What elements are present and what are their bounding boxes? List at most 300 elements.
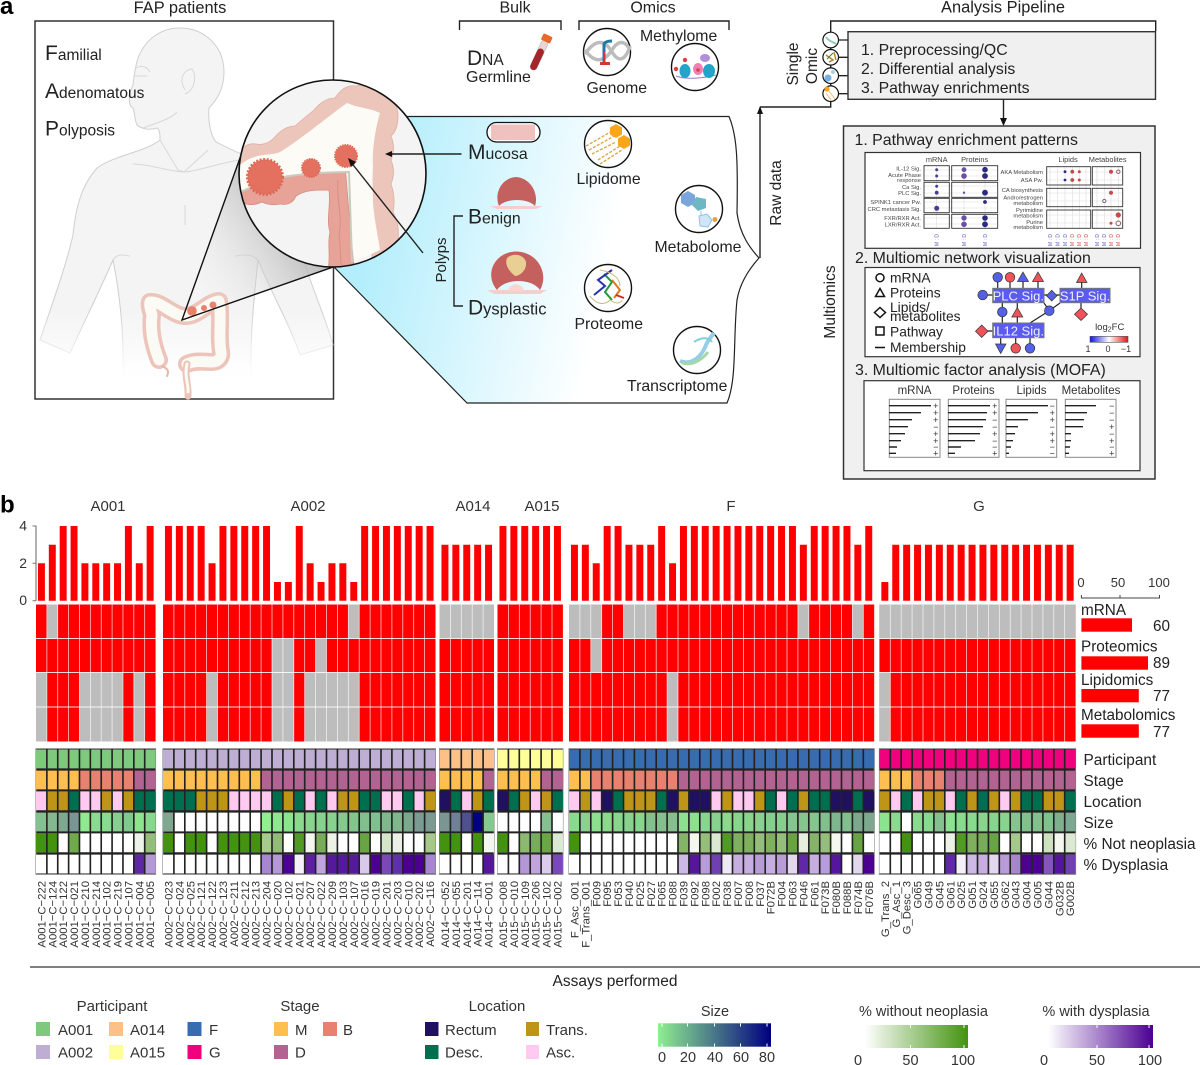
sample labels: F073B [820,881,832,914]
annotation tracks [36,749,1076,874]
track group: A001 [36,749,156,874]
label: Genome: Genome [586,80,647,97]
heatmap group: A002 [163,604,436,742]
text: pipeline steps: 2. Differential analysis [861,61,1015,78]
chart: MOFA: + [933,401,938,411]
icon: lipidome [584,120,632,168]
chart: MOFA: − [1050,448,1055,458]
chart: MOFA: + [1109,448,1114,458]
chart: MOFA: − [1109,408,1114,418]
chart: MOFA: + [992,408,997,418]
sample labels: F088B [842,881,854,914]
bar chart: samples per assay: Metabolomics [1081,707,1176,724]
legend: Size: Size [701,1004,729,1020]
legend: Stage: Stage [280,998,320,1015]
sample labels: F040 [624,881,636,907]
bar chart: samples per assay: 77 [1153,688,1170,705]
chart: pathway enrichment dot plot [865,152,1140,248]
legend: log2FC colorbar [1085,322,1131,354]
label: Dysplastic: Dysplastic [468,296,546,320]
chart: MOFA: Proteins [952,385,995,397]
chart: MOFA: Metabolites [1062,385,1121,397]
heatmap group: A001 [36,604,156,742]
chart: pathway enrichment dot plot: M : D [1077,234,1083,246]
chart: MOFA: + [992,448,997,458]
sample labels: A015−C−206 [531,881,543,948]
track group: A014 [440,749,494,874]
legend: log2FC colorbar: −1 [1121,344,1131,354]
heatmap group: A014 [440,604,494,742]
sample labels: A014−C−001 [484,881,496,948]
chart: MOFA: + [992,401,997,411]
sample labels: F008 [744,881,756,907]
sample labels: G045 [934,881,946,909]
group headings [90,498,985,515]
sample labels: F088 [668,881,680,907]
bar chart: assays per sample [41,526,1070,601]
panel: FAP patients [35,0,334,399]
sample labels: A001−C−222 [36,881,48,948]
chart: pathway enrichment dot plot: Acute Phase [888,173,921,179]
chart: pathway enrichment dot plot: Andro/estrogen [1003,196,1043,202]
label: Polyps: Polyps [433,237,450,283]
icon: genome [584,28,630,76]
sample labels: F053 [613,881,625,907]
sample labels: G002B [1065,881,1077,916]
sample labels: A002−C−202 [414,881,426,948]
sample labels: G062 [1000,881,1012,909]
track group: A015 [498,749,563,874]
network legend: mRNA [890,270,931,286]
chart: pathway enrichment dot plot: Metabolites [1089,155,1127,164]
track labels: % Dysplasia [1084,857,1169,874]
bar chart axis: assays per sample: 2 [19,555,27,571]
chart: MOFA: − [1109,415,1114,425]
chart: pathway enrichment dot plot: ASA Pw. [1021,178,1043,184]
pathway: S1P Sig: S1P Sig. [1060,288,1110,303]
bar chart: samples per assay [1081,602,1176,741]
track labels: % Not neoplasia [1084,836,1196,853]
chart: pathway enrichment dot plot: mRNA [926,155,948,164]
icon: omic lipidome [823,86,838,101]
chart: MOFA: − [1109,442,1114,452]
legend: with dysplasia: % with dysplasia [1042,1004,1151,1020]
sample labels: F009 [591,881,603,907]
sample labels: A002−C−025 [185,881,197,948]
text: pipeline steps: 3. Pathway enrichments [861,80,1030,97]
track group: A002 [163,749,436,874]
heading: pathway enrichment patterns: 1. Pathway enrichment patterns [854,132,1078,149]
sample labels: A002−C−209 [327,881,339,948]
patient box [35,21,334,399]
sample labels: F025 [635,881,647,907]
sample labels: A002−C−016 [360,881,372,948]
legend: without neoplasia [854,1004,989,1065]
sample labels: F007 [733,881,745,907]
chart: MOFA: + [933,436,938,446]
bracket: Omics [579,21,729,30]
chart: pathway enrichment dot plot: PLC Sig. [898,191,921,197]
icon: metabolome [676,186,722,232]
legend: Participant: F [209,1022,218,1039]
network legend: Membership [890,340,966,355]
sample labels: A002−C−212 [240,881,252,948]
sample labels: G004 [1022,881,1034,909]
heading: MOFA: 3. Multiomic factor analysis (MOFA) [855,362,1106,379]
sample labels: F037 [755,881,767,907]
group headings: G [973,498,985,515]
legend: log2FC colorbar: 1 [1085,344,1091,354]
chart: MOFA: + [1109,436,1114,446]
sample labels: F065 [657,881,669,907]
legend: Participant: A002 [58,1044,93,1062]
label: Proteome: Proteome [574,316,643,333]
chart: pathway enrichment dot plot: Pyrimidine [1016,208,1043,214]
legend: Participant: G [209,1044,221,1062]
sample labels: A015−C−002 [552,881,564,948]
sample labels: A002−C−107 [349,881,361,948]
chart: MOFA: − [992,436,997,446]
group headings: F [726,498,736,515]
chart: MOFA: + [933,415,938,425]
icon: omic proteome [823,50,838,65]
arrow: raw data [757,21,1156,258]
sample labels: A002−C−102 [283,881,295,948]
sample labels: A002−C−116 [425,881,437,947]
bar chart axis: assays per sample: 0 [19,592,27,608]
sample labels: F076B [864,881,876,914]
chart: pathway enrichment dot plot: FXR/RXR Act. [884,216,921,222]
sample labels: A001−C−107 [123,881,135,948]
chart: MOFA [864,381,1140,471]
chart: MOFA: − [1109,401,1114,411]
track labels: Location [1084,794,1142,811]
chart: MOFA: − [933,422,938,432]
sample labels: A002−C−213 [251,881,263,948]
chart: pathway enrichment dot plot: metabolism [1013,201,1043,207]
sample labels: A002−C−021 [294,881,306,948]
polyp: arrowed [335,145,357,167]
legend: Participant: A014 [130,1022,165,1039]
legend: Participant: A001 [58,1022,93,1039]
sample labels: A014−C−114 [473,881,485,947]
arrow: polyps to lens [348,158,423,253]
magnification wedge [182,158,333,320]
mucosa sample [487,122,540,142]
sample labels: G055 [989,881,1001,909]
axis: samples per assay: 50 [1111,575,1125,590]
label: Lipidome: Lipidome [576,171,641,188]
group headings: A002 [290,498,326,515]
sample labels: G032B [1054,881,1066,916]
chart: pathway enrichment dot plot: M : D [1063,234,1069,246]
network legend: metabolites [890,309,961,324]
chart: MOFA: mRNA [898,385,932,397]
axis: samples per assay: 0 [1077,575,1085,590]
chart: pathway enrichment dot plot: Purine [1026,220,1043,226]
chart: pathway enrichment dot plot: IL-12 Sig. [896,166,921,172]
arrow: single-omic to multiomics [1000,100,1007,126]
sample labels: A015−C−102 [542,881,554,948]
chart: MOFA: + [933,448,938,458]
sample labels: A002−C−019 [371,881,383,948]
illustration: small colon [150,301,221,396]
heading: network visualization: 2. Multiomic network visualization [855,250,1091,267]
sample labels: A001−C−005 [145,881,157,948]
text: DNA Germline: DNA [467,47,504,70]
legend: Location: Location [469,998,525,1015]
icon: transcriptome [674,326,720,374]
sample labels: F004 [777,881,789,907]
sample labels: A002−C−103 [338,881,350,948]
legend: Location: Rectum [445,1022,497,1039]
chart: pathway enrichment dot plot: SPINK1 cancer Pw. [870,200,921,206]
chart: pathway enrichment dot plot: LXR/RXR Act. [885,222,921,228]
heatmap group: A015 [498,604,563,742]
chart: pathway enrichment dot plot: response [897,178,921,184]
bar chart: samples per assay: mRNA [1081,602,1127,619]
divider [30,966,1200,968]
chart: pathway enrichment dot plot: CA biosynthesis [1002,188,1043,194]
sample labels: F_Trans_001 [580,881,592,948]
chart: MOFA: − [992,415,997,425]
text: Familial Adenomatous Polyposis: Polyposis [45,118,115,140]
track labels: Stage [1084,773,1124,790]
sample labels: G_Asc_1 [891,881,903,927]
polyp: large [248,160,282,194]
chart: MOFA: + [1050,429,1055,439]
chart: MOFA: − [933,442,938,452]
arrow: mucosa to lens [385,151,462,157]
chart: MOFA: + [1050,436,1055,446]
chart: MOFA: − [1050,442,1055,452]
sample labels: A002−C−211 [229,881,241,947]
sample labels: A001−C−021 [69,881,81,948]
bar chart: samples per assay: Proteomics [1081,639,1158,656]
chart: MOFA: + [1109,422,1114,432]
legend: Stage [274,998,353,1062]
chart: MOFA: − [992,422,997,432]
chart: pathway enrichment dot plot: M : D [983,234,989,246]
chart: pathway enrichment dot plot: M : D [1084,234,1090,246]
sample labels: G049 [924,881,936,909]
sample labels: G044 [1043,881,1055,909]
text: DNA Germline [466,47,531,86]
icon: omic transcriptome [823,32,838,48]
sample labels: F039 [678,881,690,907]
sample labels: A002−C−121 [196,881,208,948]
track group: G [879,749,1076,874]
icon: proteome [584,264,632,312]
legend: log2FC colorbar: log [1095,322,1108,333]
sample labels: A002−C−204 [262,881,274,948]
sample labels: A014−C−055 [451,881,463,948]
chart: pathway enrichment dot plot: M : D [1048,234,1054,246]
sample labels [36,881,1077,948]
chart: pathway enrichment dot plot: M : D [1070,234,1076,246]
sample labels: A014−C−201 [462,881,474,948]
track group: F [569,749,874,874]
chart: pathway enrichment dot plot: Lipids [1058,155,1078,164]
label: Single Omic [785,42,821,86]
network legend: Pathway [890,324,943,340]
label: Mucosa: Mucosa [468,141,528,164]
chart: pathway enrichment dot plot: M : D [934,234,940,246]
chart: pathway enrichment dot plot: Ca Sig. [902,185,921,191]
bar chart: samples per assay: 60 [1153,618,1170,635]
label: Benign: Benign [468,206,521,228]
label: Single Omic: Single [785,42,802,86]
chart: MOFA: + [933,408,938,418]
chart: pathway enrichment dot plot: M : D [1109,234,1115,246]
legend: with dysplasia [1040,1004,1162,1065]
chart: MOFA: − [1050,401,1055,411]
sample labels: A001−C−004 [134,881,146,948]
sample labels: F080B [831,881,843,914]
chart: pathway enrichment dot plot: AKA Metabolism [1000,170,1043,176]
sample labels: F038 [722,881,734,907]
illustration: dysplastic polyp [487,252,547,294]
sample labels: A001−C−219 [112,881,124,948]
chart: pathway enrichment dot plot: M : D [1056,234,1062,246]
track labels: Participant [1084,752,1157,769]
sample labels: F061 [809,881,821,907]
label: Raw data: Raw data [768,160,785,226]
sample labels: A001−C−124 [47,881,59,948]
group headings: A015 [524,498,560,515]
legend: Size [658,1004,775,1065]
illustration: magnified colon [236,80,426,270]
sample labels: F063 [788,881,800,907]
axis: samples per assay [1077,575,1170,598]
legend: Participant [36,998,221,1062]
polyp: medium [302,159,320,177]
network legend: Proteins [890,286,941,300]
group headings: A001 [90,498,126,515]
bar chart: samples per assay: 77 [1153,724,1170,741]
network legend [874,270,966,355]
sample labels: F046 [798,881,810,907]
axis: samples per assay: 100 [1148,575,1170,590]
chart: multiomic network [865,268,1140,357]
label: Metabolome: Metabolome [654,239,742,256]
sample labels: G024 [978,881,990,909]
sample labels: F_Asc_001 [570,881,582,938]
panel: multiomics [844,126,1155,479]
sample labels: A001−C−210 [80,881,92,948]
label: Methylome: Methylome [640,28,717,45]
bracket: Bulk [460,21,561,30]
sample labels: A014−C−052 [440,881,452,948]
sample labels: A001−C−102 [102,881,114,948]
group headings: A014 [455,498,491,515]
sample labels: A002−C−123 [218,881,230,948]
chart: pathway enrichment dot plot: M : D [1102,234,1108,246]
sample labels: A015−C−109 [520,881,532,948]
heading: Omics: Omics [630,0,676,16]
legend: without neoplasia: % without neoplasia [859,1004,989,1020]
legend: Location: Asc. [546,1044,575,1062]
sample labels: F072B [766,881,778,914]
network legend: Lipids/ [890,300,930,315]
label: Single Omic: Omic [804,48,821,84]
chart: pathway enrichment dot plot: metabolism [1013,225,1043,231]
sample labels: G051 [967,881,979,909]
sample labels: G_Trans_2 [880,881,892,937]
text: Familial Adenomatous Polyposis: Adenomatous [45,80,145,103]
illustration: benign polyp [490,177,543,209]
sample labels: A002−C−203 [392,881,404,948]
sample labels: A002−C−020 [272,881,284,948]
sample labels: F095 [602,881,614,907]
panel b label: b [0,492,15,518]
text: Familial Adenomatous Polyposis [45,42,145,140]
network nodes [976,272,1088,354]
sample labels: F098 [700,881,712,907]
chart: pathway enrichment dot plot: M : D [1116,234,1122,246]
sample labels: A002−C−201 [382,881,394,948]
sample labels: G043 [1011,881,1023,909]
sample labels: F092 [689,881,701,907]
sample labels: G005 [1032,881,1044,909]
chart: MOFA: + [933,429,938,439]
heading: Bulk: Bulk [499,0,532,16]
icon: methylome [672,44,718,90]
label: Multiomics: Multiomics [822,265,839,339]
track labels: Size [1084,815,1113,832]
legend: Stage: B [343,1022,353,1039]
text: Familial Adenomatous Polyposis: Familial [45,42,102,65]
sample labels: G065 [913,881,925,909]
legend: log2FC colorbar: 2 [1108,326,1112,334]
legend: log2FC colorbar: 0 [1105,344,1111,354]
chart: MOFA: + [992,429,997,439]
heatmap group: F [569,604,874,742]
legend: Participant: Participant [77,998,148,1015]
sample labels: G025 [956,881,968,909]
icon: blood tube [528,33,553,72]
sample labels: A015−C−008 [498,881,510,948]
pathway: IL12 Sig: IL12 Sig. [993,323,1044,338]
sample labels: F074B [853,881,865,914]
chart: pathway enrichment dot plot: M : D [962,234,968,246]
sample labels: A002−C−207 [305,881,317,948]
sample labels: G061 [945,881,957,909]
sample labels: A002−C−022 [316,881,328,948]
chart: pathway enrichment dot plot: metabolism [1013,214,1043,220]
sample labels: A001−C−122 [58,881,70,948]
bar chart: samples per assay: 89 [1153,655,1170,672]
chart: MOFA: + [1050,415,1055,425]
sample labels: A015−C−010 [509,881,521,948]
bar chart: samples per assay: Lipidomics [1081,672,1154,689]
chart: MOFA: − [1050,422,1055,432]
legend: Stage: M [295,1022,308,1039]
chart: MOFA: + [1050,408,1055,418]
text: pipeline steps [861,42,1030,97]
panel: single-omic steps [848,32,1156,99]
bar chart axis: assays per sample: 4 [19,518,27,534]
chart: MOFA: Lipids [1016,385,1047,397]
sample labels: G_Desc_3 [902,881,914,934]
legend: Location: Desc. [445,1044,483,1062]
text: pipeline steps: 1. Preprocessing/QC [861,42,1008,59]
panel: omic sample cone [335,116,759,403]
sample labels: F002 [711,881,723,907]
legend: log2FC colorbar: FC [1112,322,1124,333]
chart: MOFA: − [1109,429,1114,439]
chart: pathway enrichment dot plot: M : D [1095,234,1101,246]
